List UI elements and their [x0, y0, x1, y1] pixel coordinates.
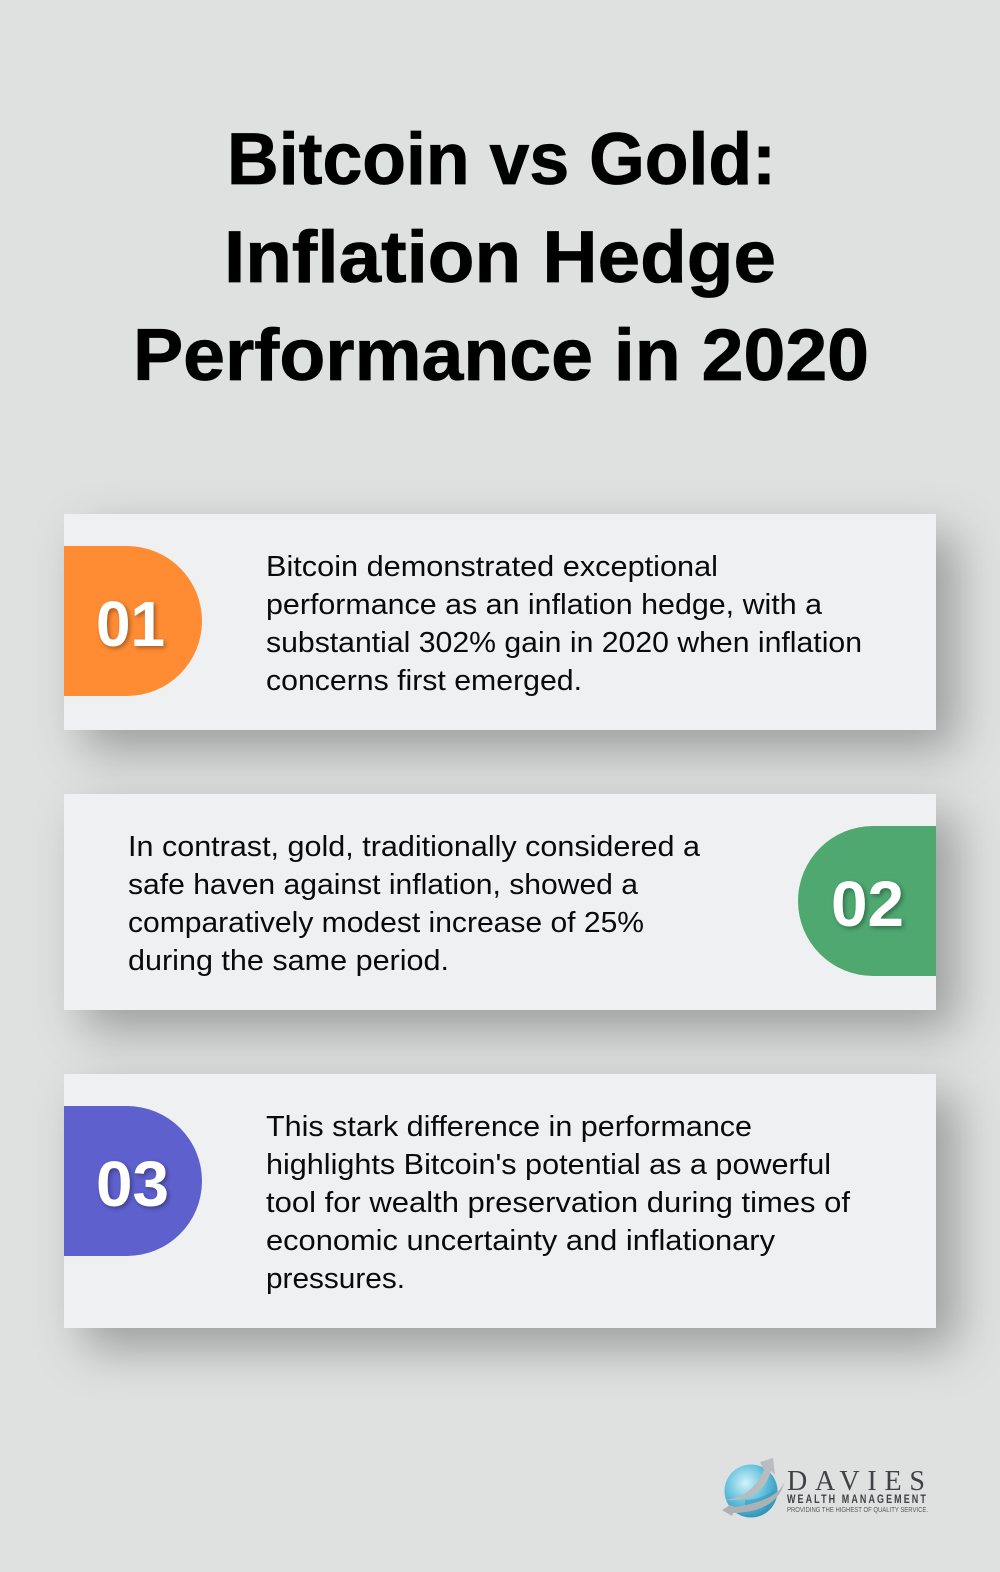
- text: stark difference: This stark difference in performance: [266, 1111, 752, 1143]
- title: Bitcoin vs Gold:: [227, 119, 776, 200]
- text: gold increase: comparatively modest increase of 25%: [128, 907, 644, 939]
- badge 02: 02: [831, 868, 904, 940]
- title: [133, 119, 869, 396]
- badge 01: 01: [96, 588, 165, 660]
- badge 02: [798, 826, 936, 976]
- text: stark difference: highlights Bitcoin's potential as a powerful: [266, 1149, 831, 1181]
- text: gold increase: In contrast, gold, traditionally considered a: [128, 831, 701, 863]
- logo: Davies Wealth Management: [722, 1458, 928, 1518]
- text: Bitcoin gain: Bitcoin demonstrated exceptional: [266, 551, 718, 583]
- text: stark difference: economic uncertainty and inflationary: [266, 1225, 776, 1257]
- text: Bitcoin gain: performance as an inflation hedge, with a: [266, 589, 823, 621]
- text: gold increase: [128, 831, 701, 977]
- wordmark: [787, 1466, 928, 1514]
- text: stark difference: tool for wealth preservation during times of: [266, 1187, 851, 1219]
- text: Bitcoin gain: substantial 302% gain in 2020 when inflation: [266, 627, 862, 659]
- title: Performance in 2020: [133, 315, 869, 396]
- wordmark: WEALTH MANAGEMENT: [787, 1494, 926, 1506]
- text: gold increase: during the same period.: [128, 945, 449, 977]
- text: Bitcoin gain: concerns first emerged.: [266, 665, 582, 697]
- badge 01: [64, 546, 202, 696]
- badge 03: [64, 1106, 202, 1256]
- title: Inflation Hedge: [224, 217, 776, 298]
- badge 03: 03: [96, 1148, 169, 1220]
- text: Bitcoin gain: [266, 551, 862, 697]
- panel: card 01 Bitcoin performance: [64, 514, 956, 750]
- wordmark: PROVIDING THE HIGHEST OF QUALITY SERVICE.: [787, 1507, 928, 1514]
- text: stark difference: pressures.: [266, 1263, 405, 1295]
- panel: card 03 wealth preservation: [64, 1074, 956, 1348]
- icon: globe with arrows: [722, 1458, 785, 1518]
- wordmark: DAVIES: [787, 1466, 925, 1497]
- text: stark difference: [266, 1111, 851, 1295]
- panel: card 02 gold performance: [64, 794, 956, 1030]
- text: gold increase: safe haven against inflation, showed a: [128, 869, 639, 901]
